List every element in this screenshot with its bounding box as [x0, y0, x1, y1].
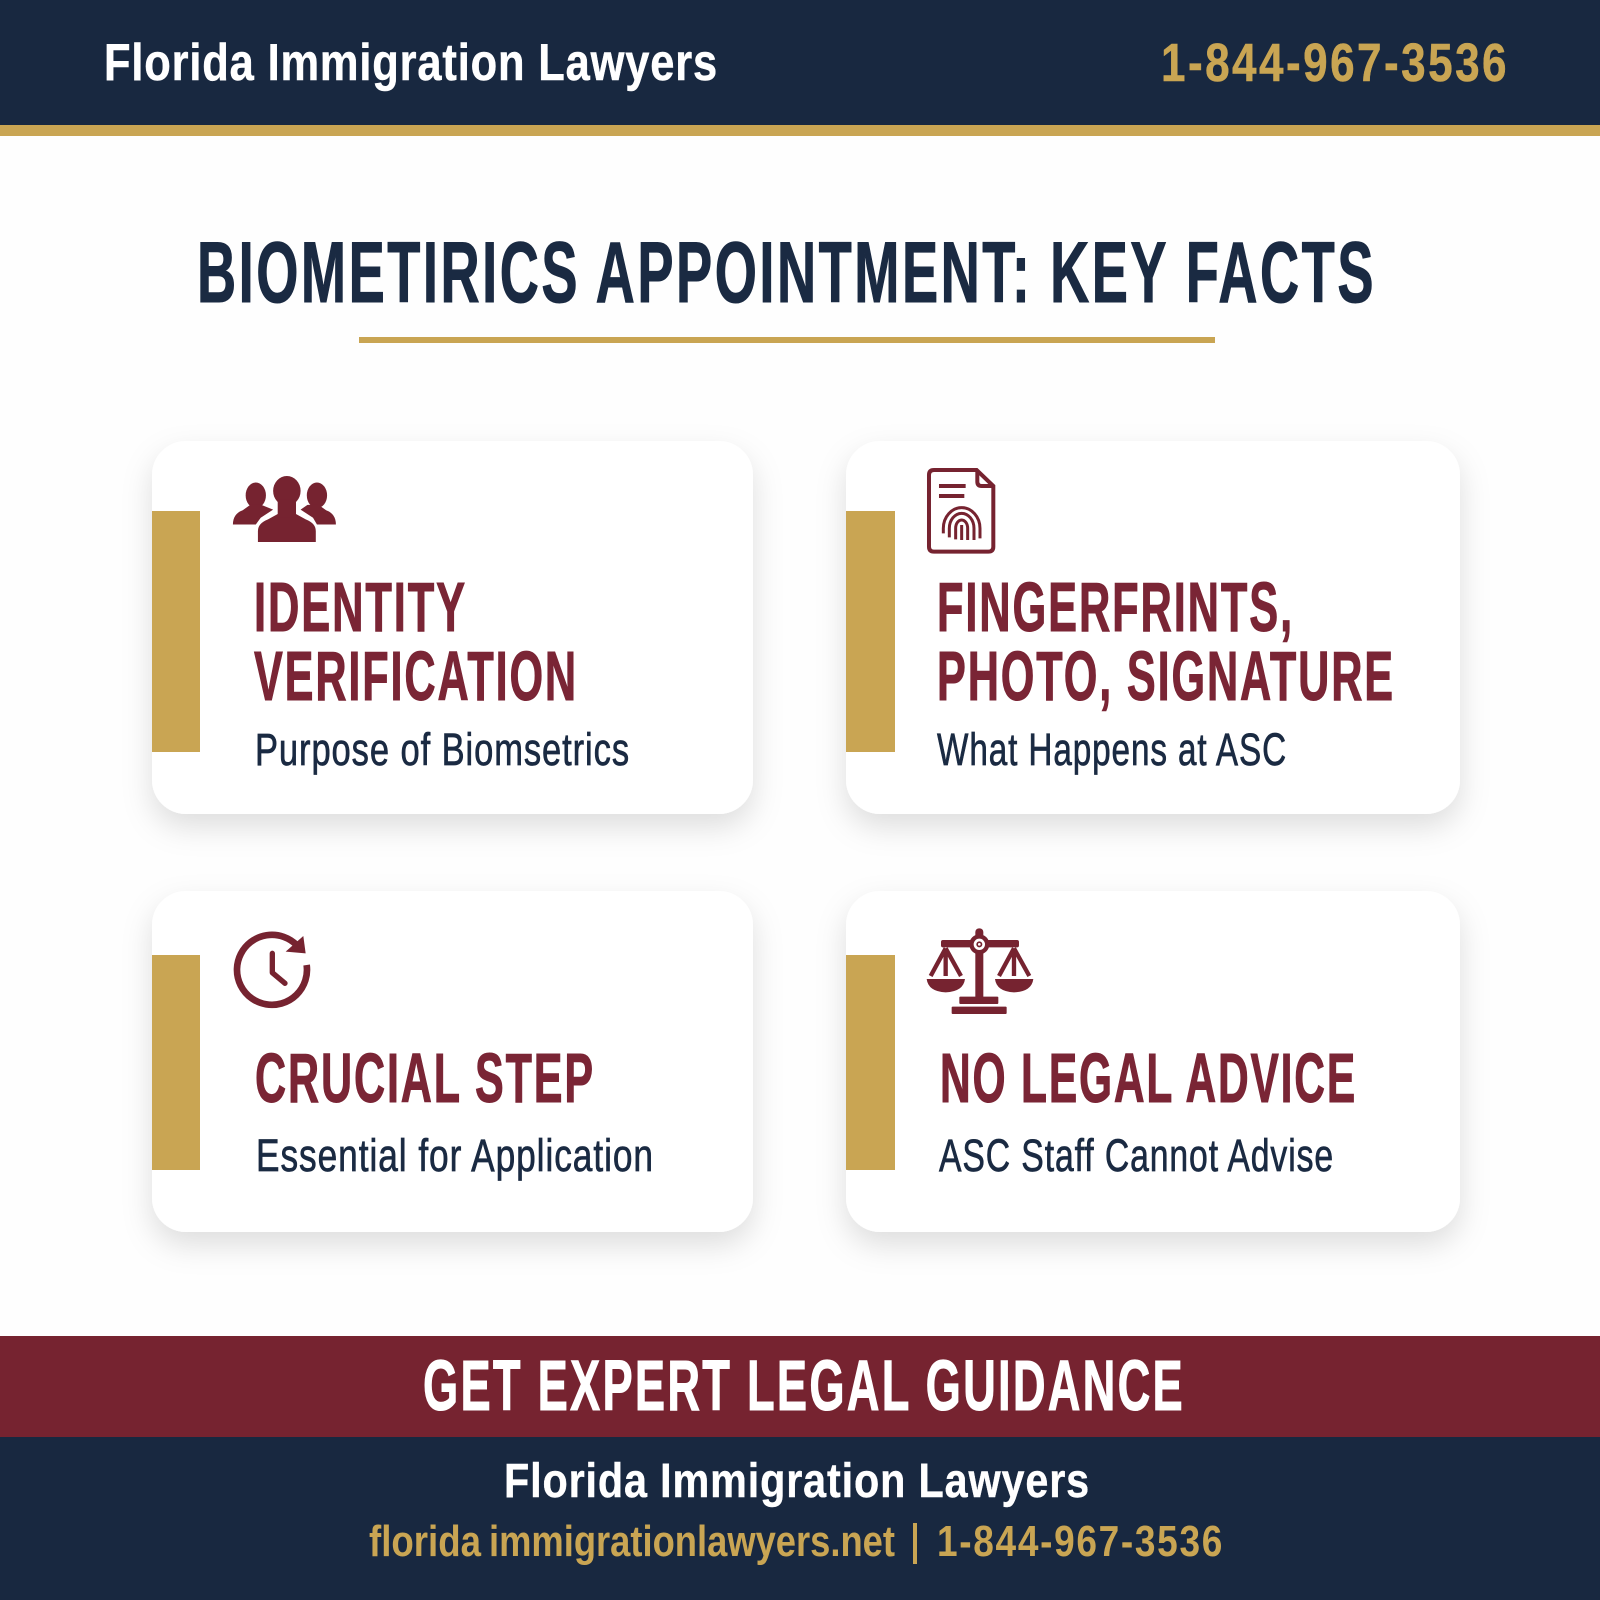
card heading line two: VERIFICATION: [254, 637, 578, 715]
icon: fingerprint document: [929, 470, 993, 552]
card subtext: Purpose of Biomsetrics: [255, 724, 630, 775]
card heading: IDENTITY: [254, 568, 467, 646]
icon: people: [233, 476, 336, 543]
panel: fingerprints, photo, signature: [846, 441, 1460, 814]
header firm name: Florida Immigration Lawyers: [104, 34, 718, 92]
footer: [0, 1437, 1600, 1600]
footer website and phone: [369, 1517, 1224, 1566]
footer website and phone: florida: [369, 1517, 481, 1566]
panel: no legal advice: [846, 891, 1460, 1232]
header phone number: 1-844-967-3536: [1161, 33, 1509, 93]
footer website and phone: immigrationlawyers.net: [489, 1517, 895, 1566]
card subtext: Essential for Application: [256, 1130, 654, 1181]
icon: clock with arrow: [237, 935, 307, 1005]
card heading: CRUCIAL STEP: [255, 1039, 595, 1117]
panel: crucial step: [152, 891, 753, 1232]
header bar: [0, 0, 1600, 136]
footer website and phone: 1-844-967-3536: [937, 1517, 1224, 1566]
icon: scales of justice: [927, 928, 1033, 1014]
call to action band: [0, 1336, 1600, 1437]
card heading: FINGERFRINTS,: [937, 568, 1294, 646]
card subtext: ASC Staff Cannot Advise: [939, 1130, 1334, 1181]
panel: identity verification: [152, 441, 753, 814]
footer firm name: Florida Immigration Lawyers: [504, 1455, 1090, 1508]
card subtext: What Happens at ASC: [937, 724, 1287, 775]
call to action band: GET EXPERT LEGAL GUIDANCE: [423, 1347, 1185, 1426]
